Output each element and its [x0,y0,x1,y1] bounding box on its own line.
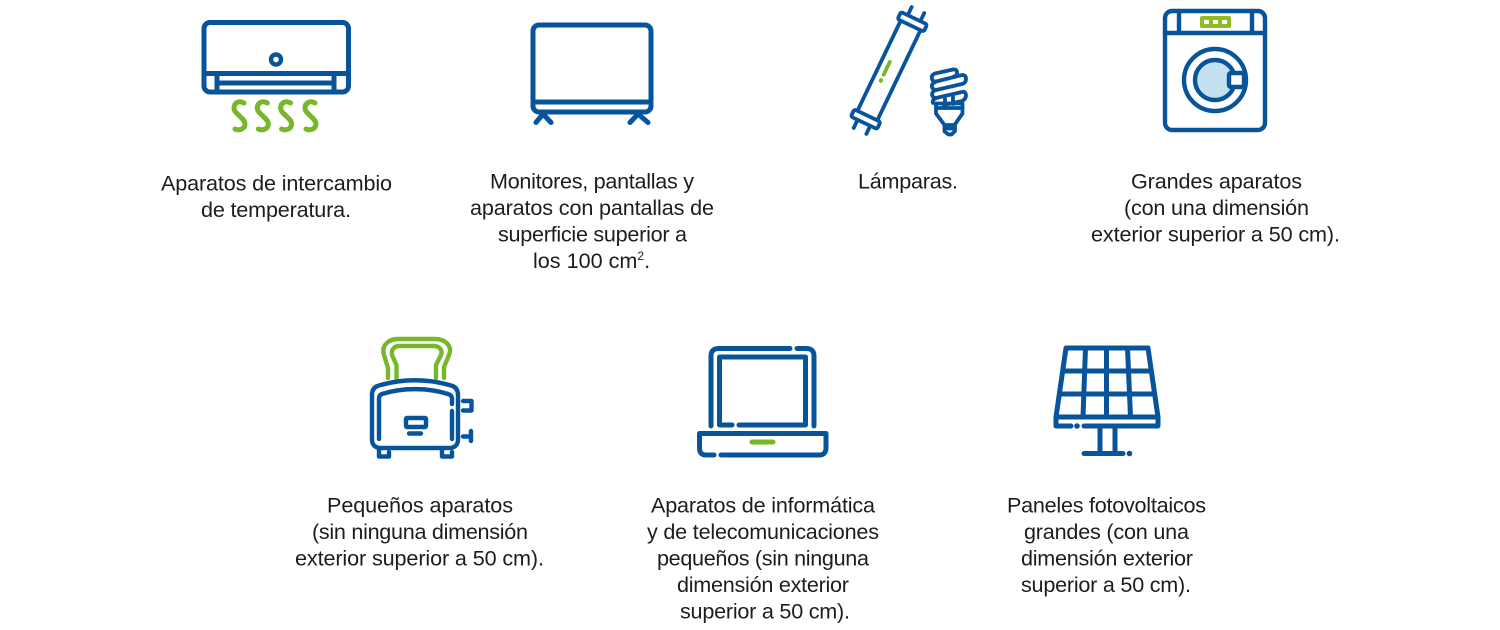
text: heat exchange appliances [161,170,392,222]
icon: toaster [372,339,472,456]
text: large appliances: (con una dimensión [1124,195,1309,220]
text: photovoltaic panels: dimensión exterior [1021,546,1193,570]
text: small appliances: (sin ninguna dimensión [312,519,528,544]
text: heat exchange appliances: de temperatura. [201,197,351,222]
text: monitors and screens: . [644,248,650,273]
icon: air conditioner [204,22,348,130]
icon: green control panel [1200,16,1231,28]
text: IT and telecom: dimensión exterior [677,572,849,597]
icon: laptop [700,348,826,455]
text: monitors and screens: superficie superior a [498,222,688,246]
text: monitors and screens: los 100 cm [533,248,637,273]
text: monitors and screens: Monitores, pantallas y [490,168,694,194]
icon: solar panel [1056,348,1158,456]
text: small appliances: exterior superior a 50 cm). [295,546,544,570]
text: IT and telecom: pequeños (sin ninguna [657,546,870,570]
text: photovoltaic panels: Paneles fotovoltaicos [1007,492,1206,518]
icon: monitor [533,25,651,122]
text: IT and telecom: Aparatos de informática [651,492,876,518]
icon: lamps [847,4,966,137]
text: IT and telecom [647,492,879,624]
icon: washing machine [1165,11,1265,130]
text: IT and telecom: y de telecomunicaciones [647,519,879,544]
text: photovoltaic panels: superior a 50 cm). [1021,572,1191,597]
text: large appliances: Grandes aparatos [1131,168,1302,194]
text: small appliances [295,492,544,570]
icon: green heat waves [234,102,316,130]
text: monitors and screens: aparatos con pantallas de [470,195,714,220]
text: photovoltaic panels [1007,492,1206,597]
text: IT and telecom: superior a 50 cm). [680,598,850,624]
icon: spiral bulb [932,69,966,134]
icon: fluorescent tube [847,4,931,137]
icon: green toaster handle [383,339,450,378]
text: large appliances: exterior superior a 50 cm). [1091,222,1340,246]
text: large appliances [1091,168,1340,246]
text: heat exchange appliances: Aparatos de intercambio [161,170,392,196]
text: lamps: Lámparas. [858,168,958,194]
text: small appliances: Pequeños aparatos [327,492,513,518]
text: monitors and screens: 2 [637,249,644,263]
text: monitors and screens [470,168,714,273]
text: photovoltaic panels: grandes (con una [1024,519,1190,544]
